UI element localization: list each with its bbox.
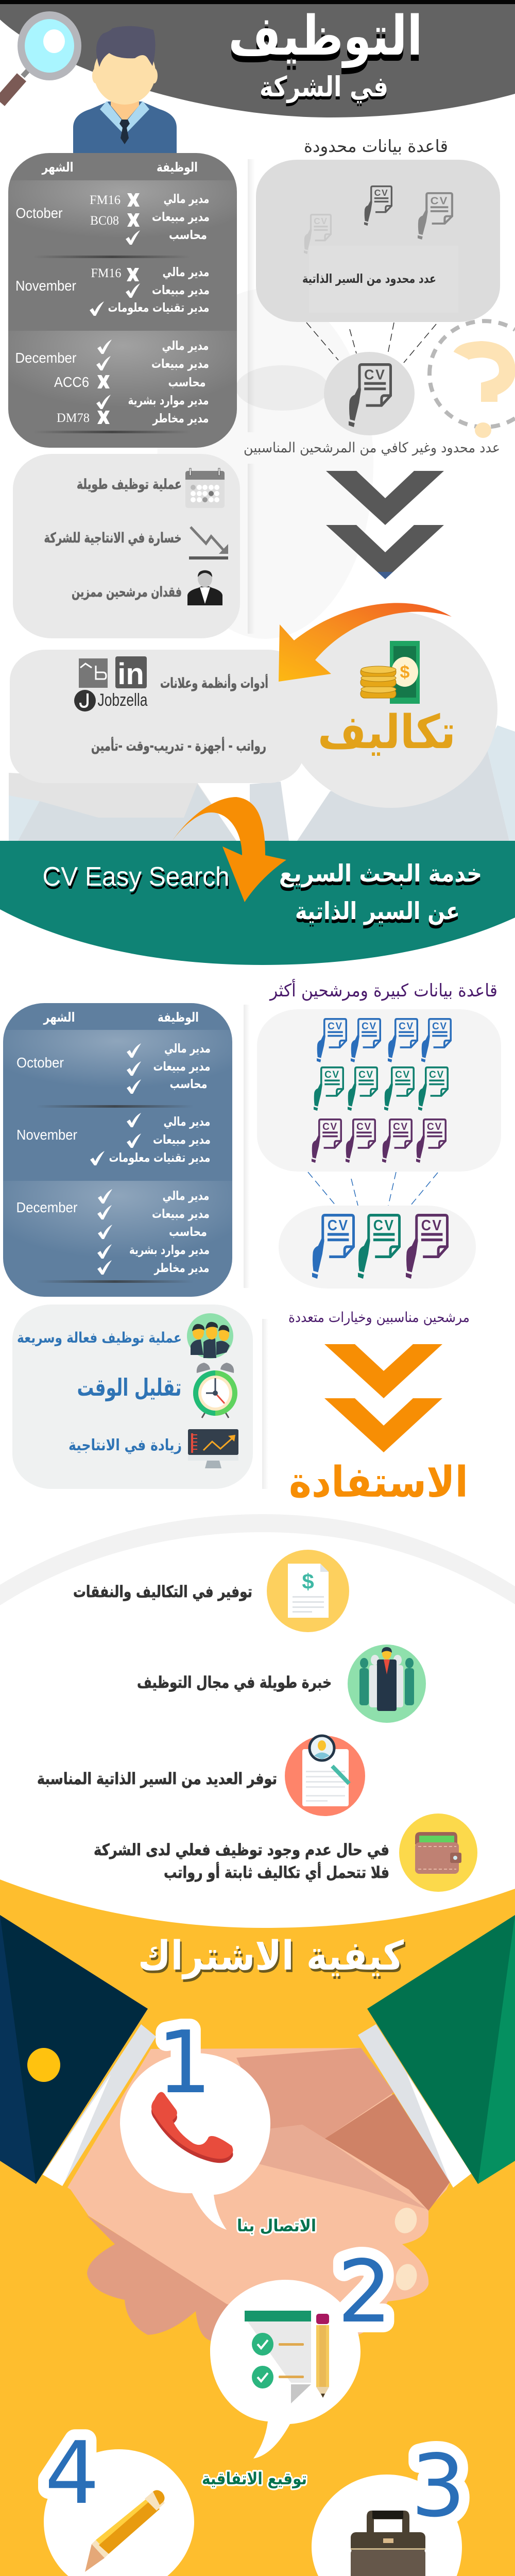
table header: job: الوظيفة [157, 160, 198, 175]
row group: November [16, 1113, 211, 1165]
icons: blue CV row: CV [432, 1021, 448, 1032]
icon: pencil [85, 2490, 165, 2572]
text: long recruitment: عملية توظيف طويلة [77, 477, 182, 493]
arrow: orange hook [171, 797, 286, 902]
panel: current job table [8, 153, 237, 448]
right sleeve [358, 1915, 515, 2188]
text: efficient recruitment: عملية توظيف فعالة وسريعة [17, 1329, 182, 1346]
header band [0, 0, 515, 117]
text: no fixed costs: فلا تتحمل أي تكاليف ثابتة أو رواتب [164, 1862, 389, 1882]
row group: December: مدير مخاطر [154, 1261, 209, 1275]
text: time reduction: تقليل الوقت [77, 1374, 181, 1401]
text: many CVs: توفر العديد من السير الذاتية المناسبة [37, 1770, 277, 1788]
row group: December: مدير مبيعات [151, 357, 209, 371]
icon: team circle [187, 1313, 233, 1359]
dashed connector lines [306, 323, 436, 363]
panel: selected CVs: CV [421, 1217, 443, 1233]
icon: candidate silhouette [187, 570, 222, 605]
text: productivity increase: زيادة في الانتاجية [68, 1436, 182, 1454]
icon: wallet [399, 1814, 477, 1892]
icons: teal CV row [314, 1067, 448, 1111]
icon: briefcase [351, 2511, 425, 2576]
icon: CV search [285, 1736, 365, 1816]
speech bubble [120, 2053, 270, 2230]
benefit: many CVs [37, 1736, 365, 1816]
benefit: savings [73, 1550, 349, 1632]
text: no fixed costs: في حال عدم وجود توظيف فعلي لدى الشركة [94, 1841, 389, 1859]
row group: December: DM78 [57, 411, 90, 425]
band: service heading [0, 797, 515, 965]
circle: costs [284, 611, 497, 808]
row group: December: مدير موارد بشرية [128, 393, 209, 408]
panel: selected CVs: CV [373, 1217, 395, 1233]
icons: blue CV row: CV [362, 1021, 377, 1032]
arrow: orange curve [279, 603, 452, 682]
benefit: experience [137, 1645, 426, 1723]
row group: December: محاسب [168, 375, 206, 389]
row group: October: محاسب [169, 228, 207, 242]
icon: linkedin: in [117, 657, 144, 691]
arrows: double chevron dark [326, 471, 444, 579]
icons: purple CV row: CV [356, 1122, 372, 1132]
row group: November: مدير مبيعات [153, 1132, 211, 1147]
heading: quick search service: عن السير الذاتية [295, 897, 460, 925]
icon: checklist and pencil [245, 2311, 329, 2403]
icon: experts [348, 1645, 426, 1723]
heading: benefit: الاستفادة [289, 1458, 468, 1507]
heading: quick search service [279, 859, 482, 928]
icon: CV light: CV [314, 216, 328, 226]
text: losing candidates: فقدان مرشحين ممزين [72, 584, 182, 600]
number: 2 [337, 2242, 392, 2342]
illustration: handshake [0, 1915, 515, 2349]
subtitle: في الشركة [260, 74, 388, 106]
icon: bill: $ [400, 663, 410, 682]
row group: November: مدير مالي [163, 265, 209, 279]
table header: job: الوظيفة [158, 1010, 199, 1025]
heading: quick search service: عن السير الذاتية [295, 901, 460, 928]
row group: October: مدير مبيعات [152, 210, 210, 224]
icon: CV medium: CV [431, 195, 448, 207]
row group: October: مدير مالي [164, 192, 209, 206]
icon: CV circle [324, 352, 415, 435]
step 3: choose package [312, 2436, 466, 2576]
icons: purple CV row: CV [322, 1122, 338, 1132]
row group: December: December [16, 1199, 77, 1215]
icons: purple CV row: CV [427, 1122, 442, 1132]
decorative arc [0, 1514, 515, 1605]
section: how to subscribe background [0, 1879, 515, 2576]
icon: jobzella logo [74, 690, 148, 711]
icon: alarm clock [193, 1363, 237, 1418]
icon: monitor chart [188, 1429, 238, 1468]
row group: November [15, 265, 210, 316]
row group: November: مدير مالي [164, 1114, 210, 1129]
icon: falling chart [189, 527, 228, 560]
icon: bayt [79, 658, 108, 688]
row group: November: مدير تقنيات معلومات [109, 1150, 210, 1165]
icons: teal CV row: CV [324, 1070, 340, 1080]
row group: December: مدير مالي [163, 1189, 209, 1203]
text: savings: توفير في التكاليف والنفقات [73, 1583, 252, 1601]
row group: November: مدير مبيعات [152, 283, 210, 297]
row group: October: مدير مبيعات [153, 1059, 210, 1074]
icons: teal CV row: CV [395, 1070, 410, 1080]
row group: December: مدير موارد بشرية [129, 1243, 210, 1257]
icon: man in suit [73, 26, 177, 156]
row group: December: مدير مبيعات [152, 1207, 210, 1221]
step 2: sign agreement [202, 2242, 392, 2488]
row group: October: FM16 [90, 193, 121, 207]
row group: December: مدير مخاطر [152, 411, 209, 426]
text: no fixed costs [94, 1841, 389, 1882]
table header: month: الشهر [43, 1010, 75, 1025]
heading: how to subscribe: كيفية الاشتراك [138, 1933, 404, 1979]
icons: teal CV row: CV [429, 1070, 444, 1080]
benefit: no fixed costs [94, 1814, 477, 1892]
row group: November: November [15, 278, 76, 294]
icon: CV dark [364, 187, 391, 226]
icon: CV circle: CV [364, 366, 386, 383]
text: productivity loss: خسارة في الانتاجية للشركة [44, 530, 181, 546]
row group: October: BC08 [90, 214, 119, 228]
icons: purple CV row: CV [393, 1122, 408, 1132]
speech bubble [44, 2449, 194, 2576]
panel: problems [13, 454, 240, 638]
left sleeve [0, 1915, 156, 2186]
caption: insufficient candidates: عدد محدود وغير كافي من المرشحين المناسبين [244, 440, 500, 456]
heading: larger database: قاعدة بيانات كبيرة ومرشحين أكثر [269, 979, 497, 1001]
icon: bill [390, 641, 420, 704]
text: experience: خبرة طويلة في مجال التوظيف [137, 1673, 332, 1692]
row group: October: October [16, 1055, 64, 1071]
icon: coins [360, 666, 396, 698]
icons: blue CV row: CV [328, 1021, 343, 1032]
panel: benefits summary [12, 1304, 268, 1489]
panel: tools and salaries [10, 650, 304, 783]
row group: December: محاسب [169, 1225, 207, 1239]
icons: blue CV row [317, 1019, 451, 1062]
text: tools and ads: أدوات وأنظمة وعلانات [160, 674, 268, 691]
icon: CV light [304, 215, 331, 254]
panel: service job table [3, 1003, 250, 1297]
row group: October [15, 192, 210, 245]
subtitle: في الشركة [260, 71, 388, 103]
row group: December: December [15, 350, 76, 366]
row group: December [16, 1189, 210, 1275]
heading: quick search service: خدمة البحث السريع [279, 859, 482, 887]
row group: October: محاسب [170, 1077, 207, 1091]
number: 1 [157, 2013, 212, 2113]
icon: CV dark: CV [374, 188, 388, 198]
heading: CV Easy Search: CV Easy Search [43, 865, 231, 895]
row group: October: October [15, 205, 63, 221]
step 1: call us [120, 2013, 316, 2235]
icon: phone [151, 2092, 233, 2163]
panel: selected CVs [279, 1206, 476, 1289]
row group: November: November [16, 1127, 77, 1143]
number: 3 [411, 2436, 466, 2536]
heading: how to subscribe: كيفية الاشتراك [140, 1936, 406, 1982]
icon: magnifier [0, 11, 81, 102]
caption: limited CVs: عدد محدود من السير الذاتية [302, 272, 436, 286]
row group: October: مدير مالي [164, 1041, 211, 1056]
icon: calendar [185, 468, 225, 508]
speech bubble [312, 2475, 462, 2576]
icon: CV medium [418, 193, 452, 240]
icons: teal CV row: CV [358, 1070, 374, 1080]
panel: selected CVs: CV [328, 1217, 349, 1233]
icon: invoice: $ [302, 1569, 314, 1594]
row group: December: ACC6 [54, 374, 89, 390]
text: salaries and others: رواتب - أجهزة - تدريب-وقت -تأمين [91, 737, 266, 754]
icon: invoice [267, 1550, 349, 1632]
row group: November: FM16 [91, 266, 122, 280]
row group: October [16, 1041, 211, 1094]
label: الاتصال بنا [237, 2216, 316, 2235]
table header: month: الشهر [41, 160, 73, 175]
background watermark person [9, 159, 515, 841]
icons: blue CV row: CV [399, 1021, 414, 1032]
row group: December: مدير مالي [162, 338, 209, 353]
panel: many CVs [257, 1009, 501, 1172]
dashed connector lines blue [308, 1172, 438, 1206]
row group: November: مدير تقنيات معلومات [108, 300, 209, 315]
arrows: double chevron orange [324, 1344, 442, 1452]
row group: December [15, 338, 209, 426]
label: توقيع الاتفاقية [202, 2469, 307, 2488]
number: 4 [45, 2424, 99, 2523]
icons: purple CV row [312, 1120, 445, 1163]
heading: limited database: قاعدة بيانات محدودة [304, 136, 448, 156]
speech bubble [210, 2280, 360, 2459]
icon: jobzella logo: Jobzella [98, 690, 148, 710]
title: التوظيف [229, 4, 422, 68]
caption: suitable candidates: مرشحين مناسبين وخيارات متعددة [288, 1310, 470, 1326]
step 4: fill in form [16, 2424, 228, 2576]
heading: CV Easy Search: CV Easy Search [42, 862, 230, 892]
icon: question mark in dashed ring [430, 321, 515, 438]
title: التوظيف [229, 10, 422, 74]
panel: limited CVs [256, 160, 500, 322]
heading: costs: تكاليف [318, 705, 456, 759]
heading: quick search service: خدمة البحث السريع [279, 863, 482, 891]
